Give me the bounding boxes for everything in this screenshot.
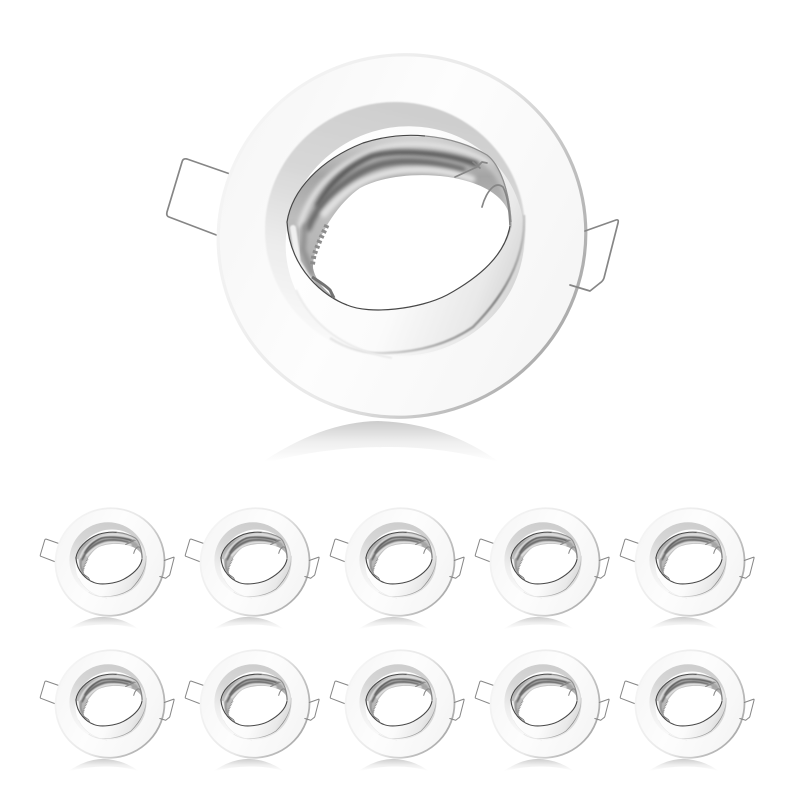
left spring clip [167,159,233,236]
small frame row 2 column 3 [327,632,473,776]
small frame row 2 column 4 [472,632,618,776]
right spring clip [570,220,618,291]
small frame row 2 column 5 [617,632,763,776]
small frame row 2 column 1 [37,632,183,776]
upper socket edge highlight [425,136,511,222]
lower retaining clip [312,277,334,298]
side retaining clip [482,185,510,225]
small frame row 1 column 4 [472,490,618,634]
lamp opening [313,175,510,310]
metal socket [280,125,520,315]
large spotlight frame [157,0,647,480]
mirror reflection [258,421,499,465]
lamp retaining teeth [312,225,327,267]
recessed shadow crescent [265,102,525,358]
tilting inner ring [253,93,557,389]
small frame row 1 column 2 [182,490,328,634]
small frame row 1 column 1 [37,490,183,634]
small frame row 2 column 2 [182,632,328,776]
socket edge line [287,135,510,310]
small frame row 1 column 5 [617,490,763,634]
outer ring [157,0,647,480]
upper retaining clip [455,162,487,177]
small frame row 1 column 3 [327,490,473,634]
product image: spotlight frames [40,53,755,768]
